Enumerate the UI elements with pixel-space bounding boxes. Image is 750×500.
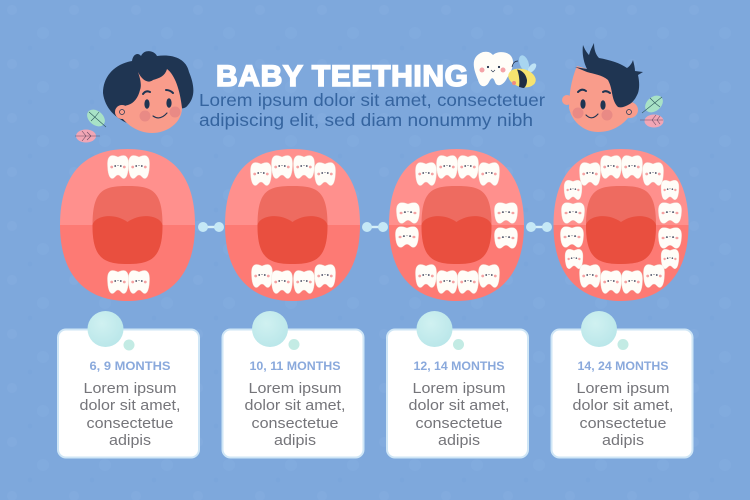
connector 2	[362, 222, 388, 232]
text block: dolor sit amet,	[408, 398, 510, 414]
heading: 10, 11 months: 10, 11 MONTHS	[250, 359, 340, 373]
panel: card 10, 11 months	[222, 311, 364, 458]
teeth: fourth set	[560, 156, 682, 294]
text block	[244, 381, 346, 449]
title: BABY TEETHING	[216, 60, 468, 93]
text block	[408, 381, 510, 449]
icon: baby boy head	[562, 43, 643, 132]
text block: Lorem ipsum	[576, 381, 670, 397]
panel: card 6, 9 months	[58, 311, 199, 458]
text block: dolor sit amet,	[244, 398, 346, 414]
connector 3	[526, 222, 552, 232]
icon: baby girl head	[103, 51, 193, 133]
text block: Lorem ipsum	[412, 381, 506, 397]
text block: Lorem ipsum	[84, 381, 176, 397]
subtitle text	[199, 90, 545, 130]
text block: dolor sit amet,	[572, 398, 674, 414]
text block: consectetue	[580, 416, 666, 432]
subtitle text: Lorem ipsum dolor sit amet, consectetuer	[199, 90, 545, 110]
heading: 6, 9 months: 6, 9 MONTHS	[90, 359, 170, 373]
panel: card 14, 24 months	[552, 311, 692, 458]
heading: 12, 14 months: 12, 14 MONTHS	[414, 359, 504, 373]
text block	[80, 381, 180, 449]
teeth: third set	[395, 156, 518, 294]
teeth: first set	[108, 156, 150, 294]
text block: adipis	[438, 433, 480, 449]
subtitle text: adipiscing elit, sed diam nonummy nibh	[199, 110, 533, 130]
panel: mouth 12-14 months	[389, 149, 524, 301]
text block: Lorem ipsum	[248, 381, 342, 397]
panel: mouth 10-11 months	[225, 149, 360, 301]
text block: dolor sit amet,	[80, 398, 180, 414]
icon: two teeth with bee	[474, 52, 538, 90]
text block: consectetue	[86, 416, 174, 432]
heading: 14, 24 months: 14, 24 MONTHS	[578, 359, 668, 373]
panel: card 12, 14 months	[387, 311, 528, 458]
panel: mouth 6-9 months	[60, 149, 195, 301]
text block: adipis	[274, 433, 316, 449]
teeth: second set	[250, 156, 336, 294]
text block: adipis	[109, 433, 151, 449]
icon: leaves right	[640, 92, 666, 128]
text block	[572, 381, 674, 449]
icon: leaves left	[75, 106, 108, 142]
text block: consectetue	[416, 416, 502, 432]
connector 1	[198, 222, 224, 232]
panel: mouth 14-24 months	[554, 149, 688, 301]
text block: consectetue	[252, 416, 338, 432]
text block: adipis	[602, 433, 644, 449]
